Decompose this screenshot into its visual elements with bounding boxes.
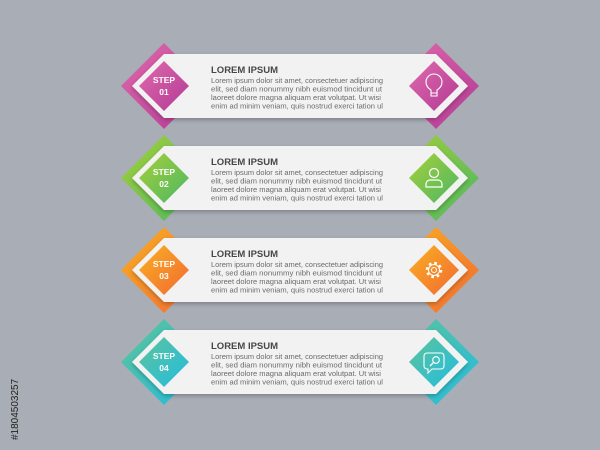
text block 03: enim ad minim veniam, quis nostrud exerci tation ul [211, 288, 383, 294]
text block 04: elit, sed diam nonummy nibh euismod tincidunt ut [211, 362, 382, 370]
text block 01 [211, 65, 383, 110]
text block 04: enim ad minim veniam, quis nostrud exerci tation ul [211, 380, 383, 386]
step badge 02: 02 [159, 179, 169, 189]
text block 03: LOREM IPSUM [211, 249, 278, 260]
step badge 01 [139, 61, 189, 111]
text block 04: laoreet dolore magna aliquam erat volutpat. Ut wisi [211, 371, 381, 378]
step badge 02: STEP [153, 167, 175, 177]
text block 01: laoreet dolore magna aliquam erat volutpat. Ut wisi [211, 95, 381, 102]
step badge 01: STEP [153, 75, 175, 85]
step badge 04 [139, 337, 189, 387]
panel: step 01 [121, 43, 479, 129]
text block 02: elit, sed diam nonummy nibh euismod tincidunt ut [211, 178, 382, 186]
step badge 04: STEP [153, 351, 175, 361]
step badge 03: STEP [153, 259, 175, 269]
text block 03: elit, sed diam nonummy nibh euismod tincidunt ut [211, 270, 382, 278]
text block 04: Lorem ipsum dolor sit amet, consectetuer adipiscing [211, 354, 383, 361]
icon: light bulb [409, 61, 459, 111]
panel: step 02 [121, 135, 479, 221]
icon: search chat [409, 337, 459, 387]
text block 03: Lorem ipsum dolor sit amet, consectetuer adipiscing [211, 262, 383, 269]
step badge 03 [139, 245, 189, 295]
text block 02: LOREM IPSUM [211, 157, 278, 168]
text block 02: laoreet dolore magna aliquam erat volutpat. Ut wisi [211, 187, 381, 194]
step badge 01: 01 [159, 87, 169, 97]
text block 03 [211, 249, 383, 294]
watermark id: #1804503257 [10, 378, 21, 440]
text block 01: Lorem ipsum dolor sit amet, consectetuer adipiscing [211, 78, 383, 85]
text block 01: enim ad minim veniam, quis nostrud exerci tation ul [211, 104, 383, 110]
text block 02: enim ad minim veniam, quis nostrud exerci tation ul [211, 196, 383, 202]
panel: step 04 [121, 319, 479, 405]
text block 02 [211, 157, 383, 202]
panel: step 03 [121, 227, 479, 313]
text block 02: Lorem ipsum dolor sit amet, consectetuer adipiscing [211, 170, 383, 177]
text block 04 [211, 341, 383, 386]
text block 01: elit, sed diam nonummy nibh euismod tincidunt ut [211, 86, 382, 94]
icon: user [409, 153, 459, 203]
step badge 04: 04 [159, 363, 169, 373]
text block 04: LOREM IPSUM [211, 341, 278, 352]
step badge 02 [139, 153, 189, 203]
text block 03: laoreet dolore magna aliquam erat volutpat. Ut wisi [211, 279, 381, 286]
step badge 03: 03 [159, 271, 169, 281]
icon: gear [409, 245, 459, 295]
text block 01: LOREM IPSUM [211, 65, 278, 76]
